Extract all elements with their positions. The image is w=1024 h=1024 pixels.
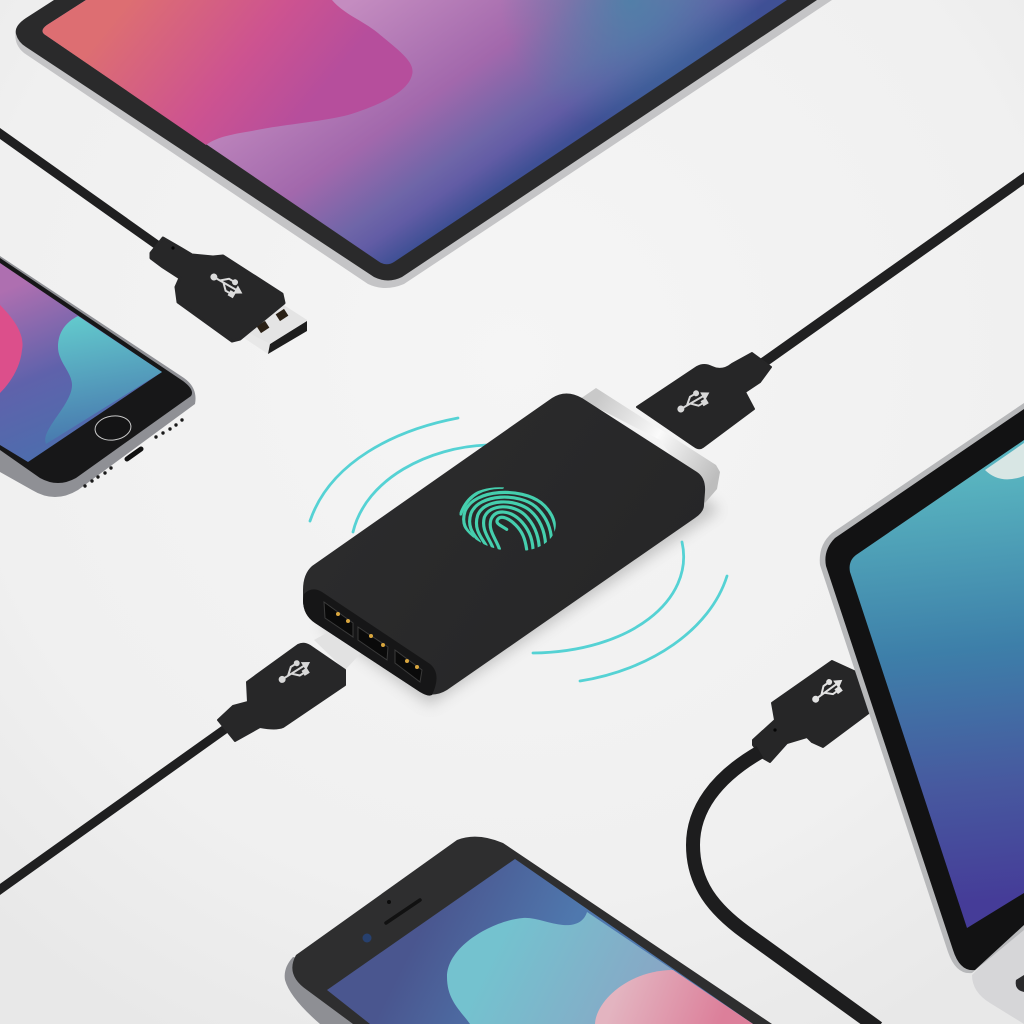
cable: bottom left <box>0 727 228 893</box>
USB-A plug: top left <box>151 238 307 354</box>
laptop lid <box>820 403 1024 973</box>
hub end face with ports <box>303 589 437 696</box>
laptop keyboard base <box>972 930 1024 1024</box>
USB icon <box>675 387 712 417</box>
laptop <box>820 403 1024 1024</box>
left phone <box>0 256 196 497</box>
tablet wallpaper blob <box>43 0 413 145</box>
camera <box>362 934 372 942</box>
speaker dots <box>83 418 184 488</box>
USB icon <box>809 675 845 707</box>
hub body <box>303 394 705 696</box>
phone wallpaper pink blob <box>0 305 23 393</box>
hub shadow <box>320 420 720 705</box>
USB icon <box>276 656 313 688</box>
cable: top right <box>760 174 1024 365</box>
bottom phone <box>285 837 772 1024</box>
USB icon <box>208 269 245 299</box>
right USB plug <box>753 661 870 762</box>
USB port 2 <box>358 627 388 660</box>
USB port 3 <box>395 650 422 682</box>
charge port <box>127 449 141 459</box>
phone wallpaper teal blob <box>45 316 162 444</box>
metal connector strip on hub <box>580 388 720 503</box>
front sensor <box>387 900 391 904</box>
fingerprint <box>461 487 556 549</box>
cable: top left <box>0 130 160 247</box>
bottom phone screen <box>327 859 753 1024</box>
USB plug: into hub bottom left <box>218 630 362 741</box>
laptop screen <box>850 440 1024 928</box>
teal blob <box>447 912 753 1024</box>
right cable <box>693 752 878 1024</box>
USB port 1 <box>324 602 353 637</box>
signal arcs <box>310 418 727 681</box>
earpiece <box>386 900 420 923</box>
tablet <box>15 0 832 288</box>
USB plug: into hub top right <box>637 353 771 448</box>
pink blob <box>595 970 753 1024</box>
home button <box>94 414 132 442</box>
